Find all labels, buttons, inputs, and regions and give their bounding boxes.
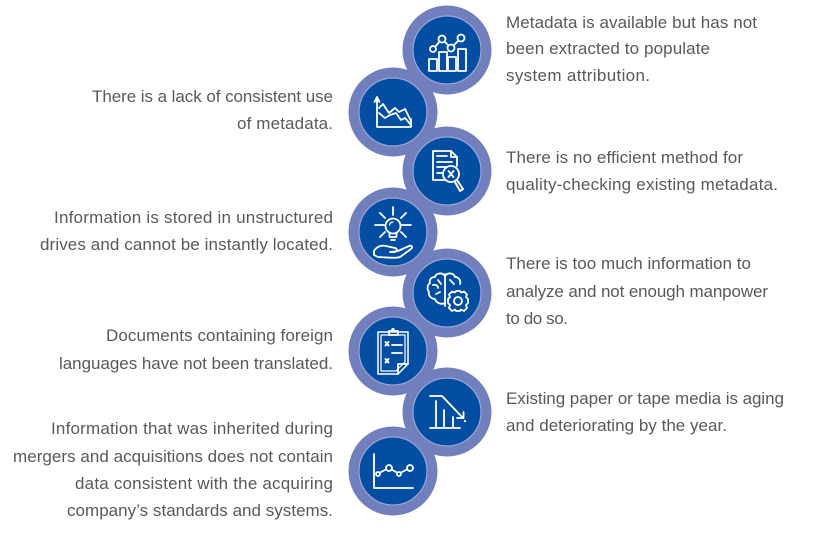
text: too much information: There is too much information to bbox=[506, 254, 751, 273]
text: too much information bbox=[506, 254, 768, 328]
icon: declining bars with arrow bbox=[413, 378, 481, 446]
icon: document with magnifier and X bbox=[413, 137, 481, 205]
icon: bar chart with connected dots bbox=[413, 16, 481, 84]
text: metadata not extracted bbox=[506, 13, 757, 85]
icon: brain with gear bbox=[413, 259, 481, 327]
text: aging media: and deteriorating by the year. bbox=[506, 416, 727, 435]
text: lack of consistent use bbox=[92, 87, 333, 133]
text: too much information: analyze and not enough manpower bbox=[506, 282, 768, 301]
text: no quality-checking method bbox=[506, 148, 778, 194]
text: unstructured drives: Information is stored in unstructured bbox=[54, 208, 333, 227]
text: mergers and acquisitions: data consistent with the acquiring bbox=[75, 474, 333, 493]
text: mergers and acquisitions: mergers and acquisitions does not contain bbox=[13, 447, 333, 466]
text: too much information: to do so. bbox=[506, 309, 568, 328]
text: no quality-checking method: There is no efficient method for bbox=[506, 148, 743, 167]
text: foreign languages: languages have not been translated. bbox=[59, 354, 333, 373]
text: unstructured drives bbox=[40, 208, 333, 254]
icon: simple line graph bbox=[359, 437, 427, 505]
circle chain backing rings bbox=[348, 6, 492, 516]
text: lack of consistent use: of metadata. bbox=[237, 114, 333, 133]
text: metadata not extracted: Metadata is available but has not bbox=[506, 13, 757, 32]
icon: light bulb above open hand bbox=[359, 198, 427, 266]
text: mergers and acquisitions: company’s standards and systems. bbox=[67, 501, 333, 520]
text: aging media: Existing paper or tape media is aging bbox=[506, 389, 784, 408]
icon: falling jagged line chart bbox=[359, 78, 427, 146]
text: lack of consistent use: There is a lack of consistent use bbox=[92, 87, 333, 106]
text: unstructured drives: drives and cannot be instantly located. bbox=[40, 235, 333, 254]
text: metadata not extracted: been extracted to populate bbox=[506, 39, 710, 58]
icon: clipboard checklist bbox=[359, 317, 427, 385]
text: mergers and acquisitions bbox=[13, 419, 333, 520]
text: aging media bbox=[506, 389, 784, 435]
text: foreign languages bbox=[59, 326, 333, 373]
text: no quality-checking method: quality-checking existing metadata. bbox=[506, 175, 778, 194]
text: mergers and acquisitions: Information that was inherited during bbox=[51, 419, 333, 438]
text: foreign languages: Documents containing foreign bbox=[106, 326, 333, 345]
text: metadata not extracted: system attribution. bbox=[506, 66, 650, 85]
